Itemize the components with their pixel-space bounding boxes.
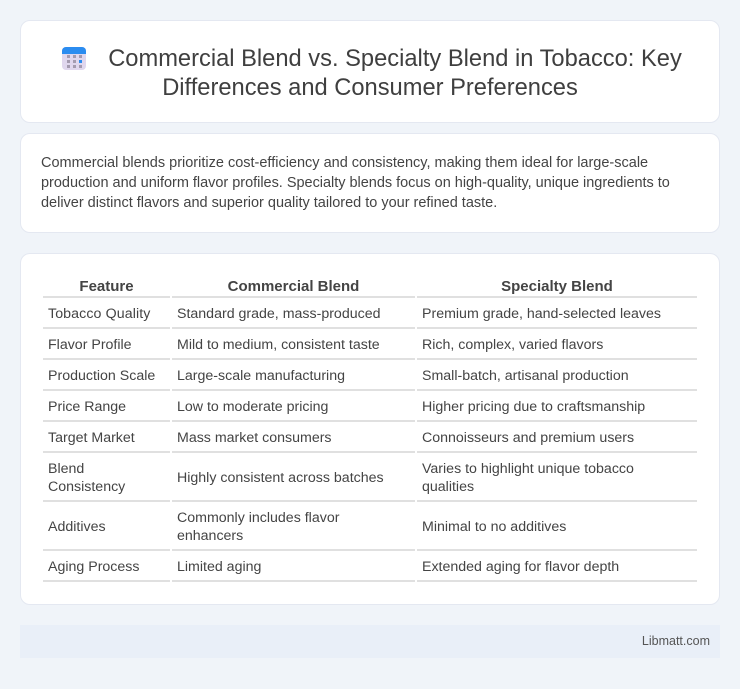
- row: aging process: [48, 559, 619, 575]
- row: aging process: Aging Process: [48, 559, 139, 575]
- row: additives: Additives: [48, 519, 106, 535]
- intro text: deliver distinct flavors and superior quality tailored to your refined taste.: [41, 195, 497, 211]
- header row: Feature: [79, 278, 134, 295]
- row: blend consistency: Blend: [48, 461, 84, 477]
- row: price range: Low to moderate pricing: [177, 399, 328, 415]
- row: aging process: Extended aging for flavor depth: [422, 559, 619, 575]
- row: tobacco quality: Premium grade, hand-selected leaves: [422, 306, 661, 322]
- panel: comparison table card: [20, 253, 720, 605]
- title: Differences and Consumer Preferences: [162, 75, 578, 101]
- row: target market: [48, 430, 634, 446]
- title: [108, 46, 682, 101]
- row: flavor profile: Rich, complex, varied flavors: [422, 337, 603, 353]
- row: production scale: Production Scale: [48, 368, 155, 384]
- intro text: production and uniform flavor profiles. Specialty blends focus on high-quality, unique ingredients to: [41, 175, 670, 191]
- title: Commercial Blend vs. Specialty Blend in Tobacco: Key: [108, 46, 682, 72]
- row: blend consistency: Consistency: [48, 479, 125, 495]
- footer bar: [20, 625, 720, 658]
- row: production scale: Small-batch, artisanal production: [422, 368, 629, 384]
- row: additives: Minimal to no additives: [422, 519, 566, 535]
- comparison table: [43, 278, 697, 582]
- row: tobacco quality: Tobacco Quality: [48, 306, 150, 322]
- row: price range: [48, 399, 645, 415]
- header row: Commercial Blend: [228, 278, 359, 295]
- row: tobacco quality: [48, 306, 661, 322]
- panel: title card: [20, 20, 720, 123]
- row: tobacco quality: Standard grade, mass-produced: [177, 306, 380, 322]
- row: additives: enhancers: [177, 528, 243, 544]
- intro text: [41, 155, 670, 211]
- header row: Specialty Blend: [501, 278, 613, 295]
- row: price range: Higher pricing due to craftsmanship: [422, 399, 645, 415]
- row: aging process: Limited aging: [177, 559, 261, 575]
- row: flavor profile: [48, 337, 603, 353]
- header row: [79, 278, 613, 295]
- row: flavor profile: Mild to medium, consistent taste: [177, 337, 380, 353]
- row: production scale: Large-scale manufacturing: [177, 368, 345, 384]
- row: target market: Connoisseurs and premium users: [422, 430, 634, 446]
- row: blend consistency: [48, 461, 634, 495]
- row: flavor profile: Flavor Profile: [48, 337, 132, 353]
- row: target market: Target Market: [48, 430, 135, 446]
- icon: calendar: [62, 47, 86, 70]
- row: production scale: [48, 368, 629, 384]
- row: blend consistency: Highly consistent across batches: [177, 470, 384, 486]
- row: price range: Price Range: [48, 399, 126, 415]
- row: blend consistency: Varies to highlight unique tobacco: [422, 461, 634, 477]
- panel: intro card: [20, 133, 720, 233]
- row: target market: Mass market consumers: [177, 430, 332, 446]
- row: additives: Commonly includes flavor: [177, 510, 339, 526]
- row: blend consistency: qualities: [422, 479, 474, 495]
- row: additives: [48, 510, 566, 544]
- footer credit: Libmatt.com: [642, 634, 710, 648]
- intro text: Commercial blends prioritize cost-efficiency and consistency, making them ideal for large-scale: [41, 155, 648, 171]
